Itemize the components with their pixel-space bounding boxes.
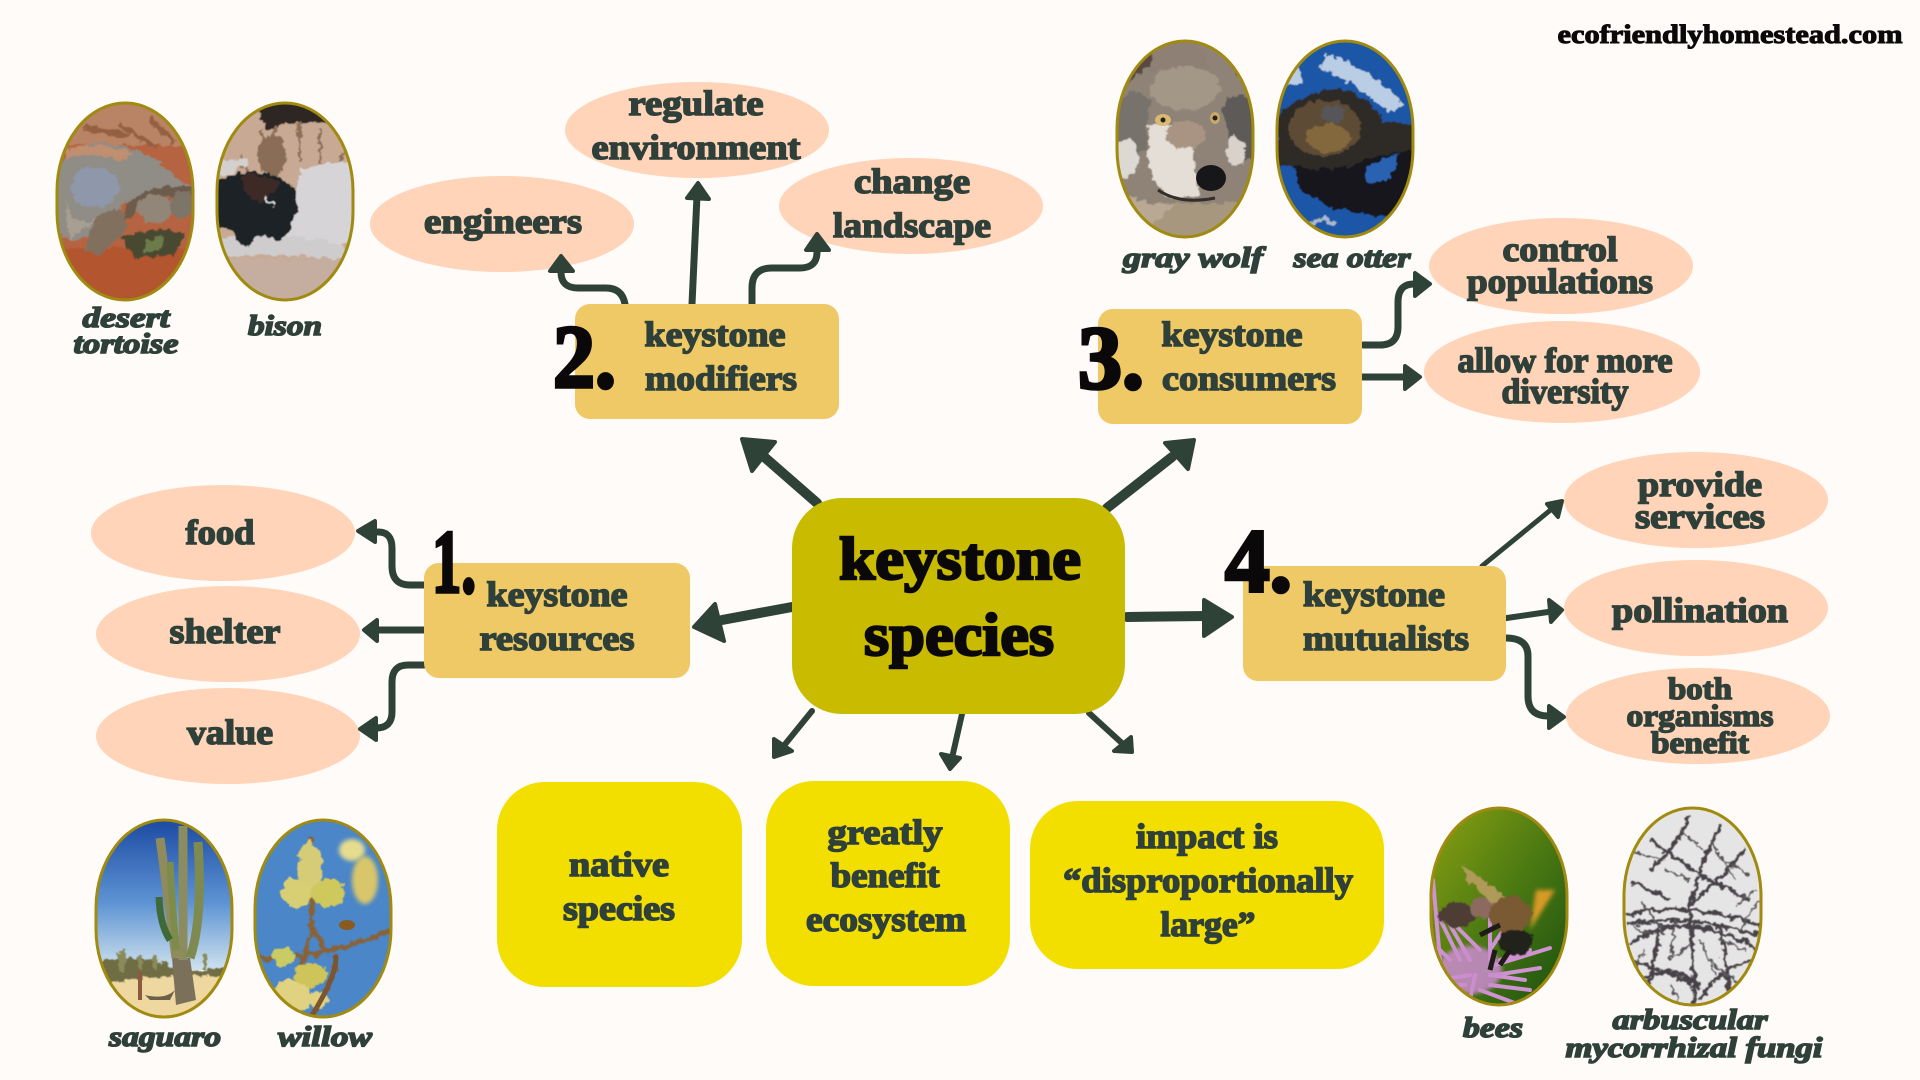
photo: gray wolf xyxy=(1116,40,1254,238)
box: impact is disproportionally large: impact is xyxy=(1136,817,1278,856)
box 3: keystone consumers xyxy=(1098,309,1362,424)
label: sea otter: sea otter xyxy=(1292,243,1412,274)
box 4: keystone mutualists: keystone xyxy=(1303,575,1445,614)
oval: allow for more diversity: allow for more xyxy=(1458,341,1672,380)
arrow: mutualists to both organisms benefit xyxy=(1506,638,1564,728)
oval: regulate environment xyxy=(565,82,829,178)
arrow: center to keystone modifiers xyxy=(742,439,817,503)
number 2: 2. xyxy=(553,308,616,407)
oval: regulate environment: regulate xyxy=(628,84,764,123)
oval: engineers xyxy=(370,176,634,272)
box 2: keystone modifiers xyxy=(575,304,839,419)
arrow: modifiers to engineers xyxy=(550,256,625,304)
oval: change landscape: landscape xyxy=(833,206,991,245)
box: greatly benefit ecosystem: benefit xyxy=(830,856,940,895)
oval: change landscape xyxy=(779,158,1043,254)
center box: keystone species xyxy=(792,498,1125,714)
arrow: consumers to control populations xyxy=(1363,273,1430,345)
oval: pollination xyxy=(1564,560,1828,656)
oval: food xyxy=(91,485,355,581)
photo: saguaro xyxy=(90,820,240,1025)
oval: provide services: provide xyxy=(1638,465,1762,504)
label: desert tortoise: tortoise xyxy=(74,329,178,360)
center box: keystone species: keystone xyxy=(839,526,1081,592)
oval: both organisms benefit: benefit xyxy=(1651,725,1750,760)
number 3: 3. xyxy=(1078,309,1144,408)
arrow: center to keystone consumers xyxy=(1107,440,1194,508)
box: impact is disproportionally large: “disproportionally xyxy=(1063,861,1354,900)
oval: value xyxy=(96,688,360,784)
box 4: keystone mutualists xyxy=(1243,566,1506,681)
center box: keystone species: species xyxy=(864,602,1054,668)
label: saguaro: saguaro xyxy=(108,1022,221,1053)
photo: sea otter xyxy=(1276,40,1414,238)
label: arbuscular mycorrhizal fungi xyxy=(1566,1005,1823,1064)
arrow: center to keystone resources xyxy=(694,604,792,641)
oval: food: food xyxy=(186,513,255,552)
box 1: keystone resources: resources xyxy=(480,619,634,658)
box: native species xyxy=(497,782,742,987)
box: native species: species xyxy=(563,889,675,928)
label: arbuscular mycorrhizal fungi: arbuscular xyxy=(1612,1005,1769,1036)
oval: change landscape: change xyxy=(854,162,970,201)
photo: willow xyxy=(255,820,392,1017)
box 3: keystone consumers: keystone xyxy=(1162,315,1302,354)
box: impact is disproportionally large xyxy=(1030,801,1384,969)
oval: provide services: services xyxy=(1635,497,1765,536)
number 1: 1. xyxy=(432,513,476,612)
box 2: keystone modifiers: modifiers xyxy=(645,359,797,398)
label: desert tortoise xyxy=(74,303,178,360)
oval: control populations xyxy=(1429,218,1693,314)
box 2: keystone modifiers: keystone xyxy=(644,315,786,354)
oval: regulate environment: environment xyxy=(592,128,801,167)
label: willow: willow xyxy=(278,1022,372,1053)
oval: engineers: engineers xyxy=(424,202,582,241)
arrow: consumers to allow diversity xyxy=(1362,366,1420,389)
website credit: ecofriendlyhomestead.com xyxy=(1558,20,1903,49)
arrow: resources to value xyxy=(360,665,424,740)
oval: allow for more diversity xyxy=(1424,321,1700,423)
oval: shelter: shelter xyxy=(170,612,280,651)
arrow: mutualists to provide services xyxy=(1482,501,1562,566)
oval: allow for more diversity: diversity xyxy=(1502,372,1629,411)
arrow: resources to shelter xyxy=(364,620,424,641)
box: greatly benefit ecosystem xyxy=(766,781,1010,986)
box: greatly benefit ecosystem: greatly xyxy=(828,813,943,852)
box: impact is disproportionally large: large” xyxy=(1160,905,1256,944)
arrow: resources to food xyxy=(358,521,424,585)
arrow: center to greatly benefit xyxy=(941,714,962,769)
label: desert tortoise: desert xyxy=(82,303,171,334)
oval: control populations: control xyxy=(1502,230,1618,269)
arrow: modifiers to change landscape xyxy=(752,234,829,304)
oval: both organisms benefit: both xyxy=(1668,671,1732,706)
box 3: keystone consumers: consumers xyxy=(1162,359,1336,398)
arrow: mutualists to pollination xyxy=(1493,600,1562,622)
number 4: 4. xyxy=(1225,512,1292,611)
oval: both organisms benefit: organisms xyxy=(1626,698,1774,733)
photo: arbuscular mycorrhizal fungi xyxy=(1624,808,1761,1005)
label: bison: bison xyxy=(248,311,322,342)
oval: both organisms benefit xyxy=(1566,668,1830,764)
photo: desert tortoise xyxy=(56,102,194,302)
oval: provide services xyxy=(1564,452,1828,548)
label: arbuscular mycorrhizal fungi: mycorrhizal fungi xyxy=(1566,1033,1823,1064)
label: bees: bees xyxy=(1463,1013,1523,1044)
label: gray wolf: gray wolf xyxy=(1122,243,1266,274)
oval: pollination: pollination xyxy=(1612,591,1788,630)
photo: bees xyxy=(1431,808,1567,1005)
box: greatly benefit ecosystem: ecosystem xyxy=(806,900,966,939)
oval: value: value xyxy=(187,713,273,752)
photo: bison xyxy=(216,102,354,302)
box 1: keystone resources: keystone xyxy=(486,575,628,614)
box: native species: native xyxy=(569,845,669,884)
arrow: center to impact xyxy=(1089,713,1132,752)
box 1: keystone resources xyxy=(424,563,690,678)
arrow: center to native species xyxy=(774,711,812,757)
oval: shelter xyxy=(96,586,360,682)
arrow: center to keystone mutualists xyxy=(1127,600,1232,636)
arrow: modifiers to regulate environment xyxy=(687,183,709,304)
oval: control populations: populations xyxy=(1467,262,1653,301)
box 4: keystone mutualists: mutualists xyxy=(1303,619,1469,658)
